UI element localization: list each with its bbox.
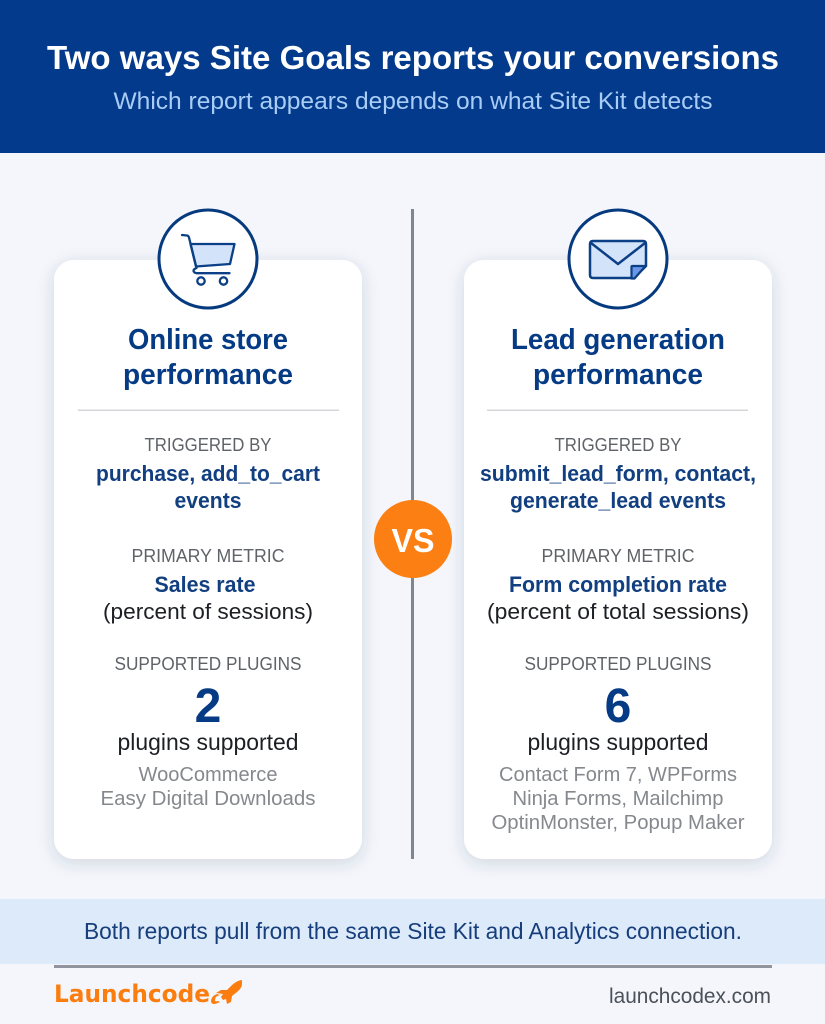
heading: Lead generation (511, 324, 725, 356)
primary metric block: PRIMARY METRIC (132, 546, 284, 566)
trigger block: generate_lead events (510, 488, 726, 513)
trigger block (96, 435, 321, 513)
supported plugins block (100, 654, 316, 810)
supported plugins block: Easy Digital Downloads (100, 788, 316, 810)
primary metric block (487, 546, 749, 624)
supported plugins block: 6 (605, 680, 631, 733)
center divider line (411, 209, 414, 859)
heading: Online store (128, 324, 288, 356)
supported plugins block: Ninja Forms, Mailchimp (512, 788, 724, 810)
supported plugins block: SUPPORTED PLUGINS (524, 654, 712, 674)
header banner (0, 0, 825, 153)
subtitle: Which report appears depends on what Site Kit detects (114, 88, 712, 115)
trigger block: TRIGGERED BY (554, 435, 682, 455)
supported plugins block: WooCommerce (138, 764, 278, 786)
primary metric block: PRIMARY METRIC (542, 546, 694, 566)
icon: shopping cart (159, 210, 257, 308)
trigger block: TRIGGERED BY (144, 435, 272, 455)
VS badge: VS (392, 522, 434, 559)
VS badge (374, 500, 452, 578)
logo: Launchcode: Launchcode (54, 980, 210, 1008)
supported plugins block: plugins supported (528, 729, 708, 755)
callout band: Both reports pull from the same Site Kit and Analytics connection. (84, 918, 742, 944)
trigger block: purchase, add_to_cart (96, 461, 321, 486)
primary metric block: Form completion rate (509, 572, 727, 597)
website: launchcodex.com (609, 985, 771, 1008)
trigger block: submit_lead_form, contact, (480, 461, 756, 486)
icon: rocket plane (211, 980, 242, 1004)
heading: performance (123, 359, 293, 391)
heading: performance (533, 359, 703, 391)
footer rule (54, 965, 772, 968)
trigger block (480, 435, 756, 513)
supported plugins block: plugins supported (118, 729, 298, 755)
primary metric block: (percent of total sessions) (487, 599, 749, 624)
supported plugins block: SUPPORTED PLUGINS (114, 654, 302, 674)
supported plugins block: Contact Form 7, WPForms (499, 764, 737, 786)
panel: lead generation (464, 210, 772, 859)
trigger block: events (174, 488, 242, 513)
icon: envelope (569, 210, 667, 308)
supported plugins block (492, 654, 745, 834)
panel: online store (54, 210, 362, 859)
primary metric block: (percent of sessions) (103, 599, 313, 624)
primary metric block (103, 546, 313, 624)
primary metric block: Sales rate (154, 572, 256, 597)
title: Two ways Site Goals reports your conversions (47, 39, 779, 76)
supported plugins block: 2 (195, 680, 221, 733)
supported plugins block: OptinMonster, Popup Maker (492, 812, 745, 834)
callout band (0, 899, 825, 964)
